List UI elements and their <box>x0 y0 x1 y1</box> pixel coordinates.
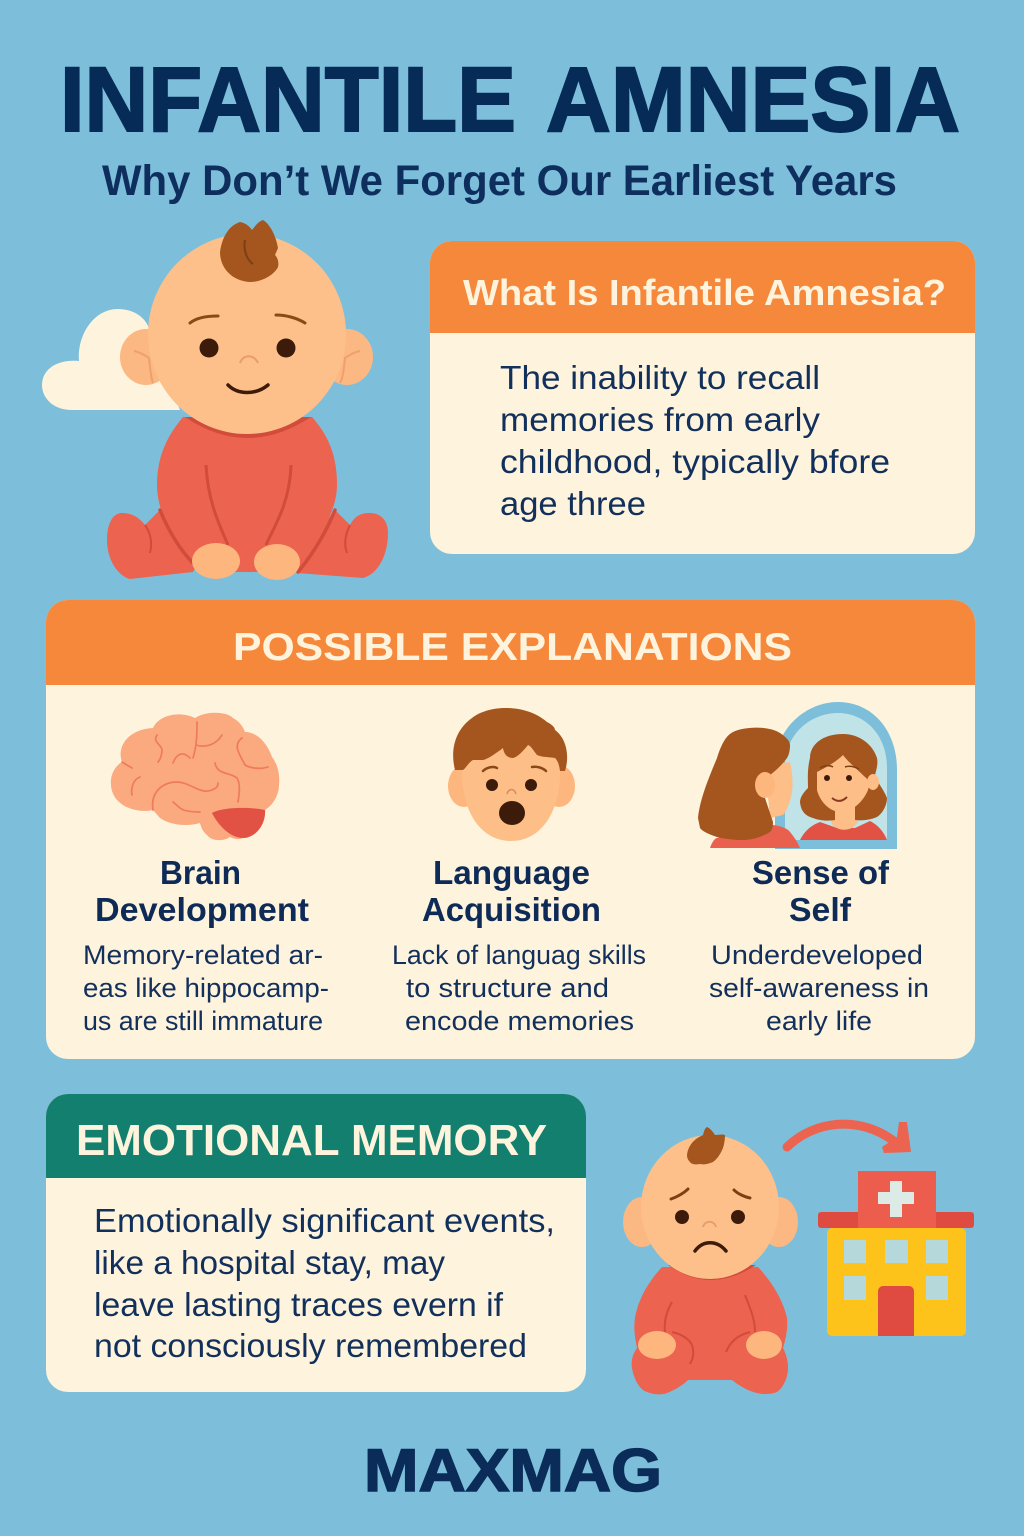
text: sense of self: Underdeveloped <box>711 940 923 970</box>
panel: emotional memory <box>46 1094 586 1392</box>
panel heading: EMOTIONAL MEMORY <box>76 1116 547 1165</box>
text: sense of self <box>709 940 929 1036</box>
emotional memory text: leave lasting traces evern if <box>94 1286 504 1323</box>
text: brain development: eas like hippocamp- <box>83 973 329 1003</box>
collar shadow <box>668 1265 756 1280</box>
emotional memory text <box>94 1202 555 1364</box>
text: brain development: us are still immature <box>83 1006 323 1036</box>
emotional memory text: like a hospital stay, may <box>94 1244 445 1281</box>
heading: brain development: Brain <box>160 854 241 891</box>
definition text <box>500 359 890 522</box>
icon: cloud <box>42 309 180 410</box>
panel header <box>46 600 975 685</box>
definition text: age three <box>500 485 646 522</box>
baby body and legs <box>632 1267 788 1394</box>
baby head <box>148 234 346 434</box>
panel header <box>46 1094 586 1178</box>
icon: brain <box>111 713 279 840</box>
icon: person looking in mirror <box>698 702 897 849</box>
illustration: sad baby <box>623 1127 798 1394</box>
heading: sense of self: Sense of <box>752 854 890 891</box>
icon: surprised child <box>448 708 575 841</box>
panel: possible explanations <box>46 600 975 1059</box>
baby body <box>157 417 337 572</box>
definition text: memories from early <box>500 401 821 438</box>
text: language acquisition: encode memories <box>405 1006 634 1036</box>
baby head <box>641 1135 779 1279</box>
baby ears <box>623 1197 798 1247</box>
text: brain development: Memory-related ar- <box>83 940 323 970</box>
title <box>60 49 960 151</box>
baby hair <box>687 1127 725 1164</box>
panel heading: POSSIBLE EXPLANATIONS <box>233 626 792 669</box>
definition text: childhood, typically bfore <box>500 443 890 480</box>
emotional memory text: not consciously remembered <box>94 1327 527 1364</box>
panel: what is infantile amnesia <box>430 241 975 554</box>
collar shadow <box>185 417 311 438</box>
text: language acquisition: to structure and <box>406 973 609 1003</box>
heading: sense of self <box>752 854 890 928</box>
text: sense of self: early life <box>766 1006 872 1036</box>
subtitle: Why Don’t We Forget Our Earliest Years <box>102 157 897 205</box>
footer logo: MAXMAG <box>364 1437 662 1504</box>
definition text: The inability to recall <box>500 359 820 396</box>
panel heading: What Is Infantile Amnesia? <box>463 272 946 313</box>
baby legs and feet <box>107 510 388 579</box>
text: sense of self: self-awareness in <box>709 973 929 1003</box>
heading: sense of self: Self <box>789 891 852 928</box>
title: AMNESIA <box>546 49 960 151</box>
text: language acquisition: Lack of languag skills <box>392 940 646 970</box>
heading: language acquisition <box>422 854 601 928</box>
baby hair <box>220 220 278 282</box>
emotional memory text: Emotionally significant events, <box>94 1202 555 1239</box>
baby sad face <box>671 1189 750 1251</box>
baby face <box>190 315 305 392</box>
baby ears <box>120 329 373 385</box>
baby hands <box>192 543 240 579</box>
illustration: sitting baby with cloud <box>42 220 388 580</box>
heading: language acquisition: Language <box>433 854 590 891</box>
arrow: baby to hospital <box>787 1122 911 1153</box>
panel header <box>430 241 975 333</box>
text: language acquisition <box>392 940 646 1036</box>
baby hands <box>638 1331 676 1359</box>
text: brain development <box>83 940 329 1036</box>
title: INFANTILE <box>60 49 516 151</box>
heading: brain development <box>95 854 309 928</box>
heading: language acquisition: Acquisition <box>422 891 601 928</box>
icon: hospital <box>818 1171 974 1336</box>
heading: brain development: Development <box>95 891 309 928</box>
